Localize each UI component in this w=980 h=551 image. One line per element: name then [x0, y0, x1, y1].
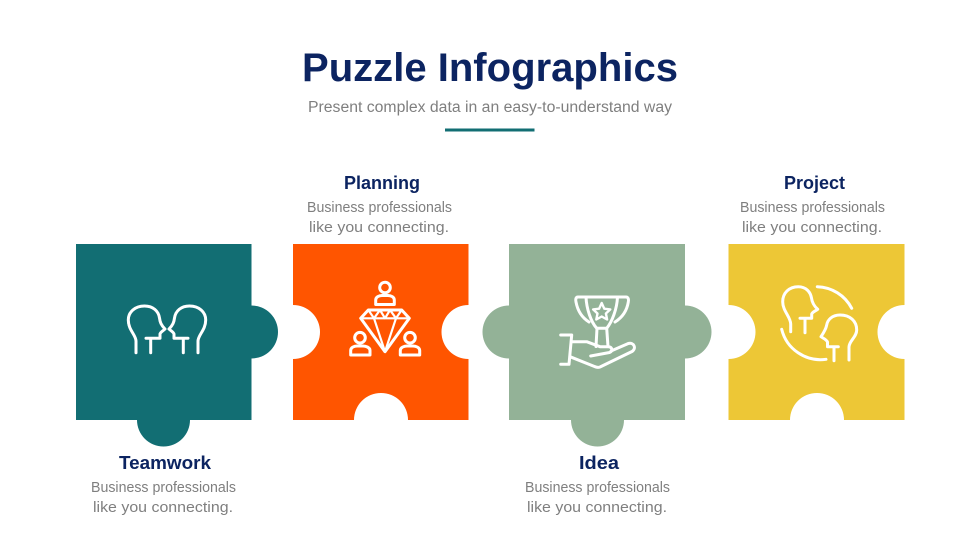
subtitle: Present complex data in an easy-to-understand way [308, 99, 672, 116]
label: idea: Idea [579, 453, 620, 473]
icon: diamond with people [351, 282, 420, 355]
icon: trophy on hand [561, 297, 634, 367]
label: planning: Planning [344, 173, 420, 193]
label: idea: like you connecting. [527, 500, 667, 516]
puzzle piece: teamwork [76, 244, 278, 446]
label: planning: like you connecting. [309, 220, 449, 236]
label: teamwork: Business professionals [91, 480, 236, 496]
title: Puzzle Infographics [302, 46, 678, 90]
label: teamwork [91, 453, 236, 516]
title underline [445, 128, 534, 132]
label: teamwork: Teamwork [119, 453, 212, 473]
label: planning [307, 173, 452, 236]
label: project: Project [784, 173, 845, 193]
puzzle piece: idea [483, 244, 712, 446]
icon: two heads facing [128, 306, 206, 353]
label: project: like you connecting. [742, 220, 882, 236]
label: idea [525, 453, 670, 516]
label: planning: Business professionals [307, 200, 452, 216]
puzzle piece: project [728, 244, 904, 420]
icon: two heads with cycle arcs [782, 287, 857, 361]
puzzle piece: planning [293, 244, 468, 420]
label: project: Business professionals [740, 200, 885, 216]
label: idea: Business professionals [525, 480, 670, 496]
label: teamwork: like you connecting. [93, 500, 233, 516]
label: project [740, 173, 885, 236]
